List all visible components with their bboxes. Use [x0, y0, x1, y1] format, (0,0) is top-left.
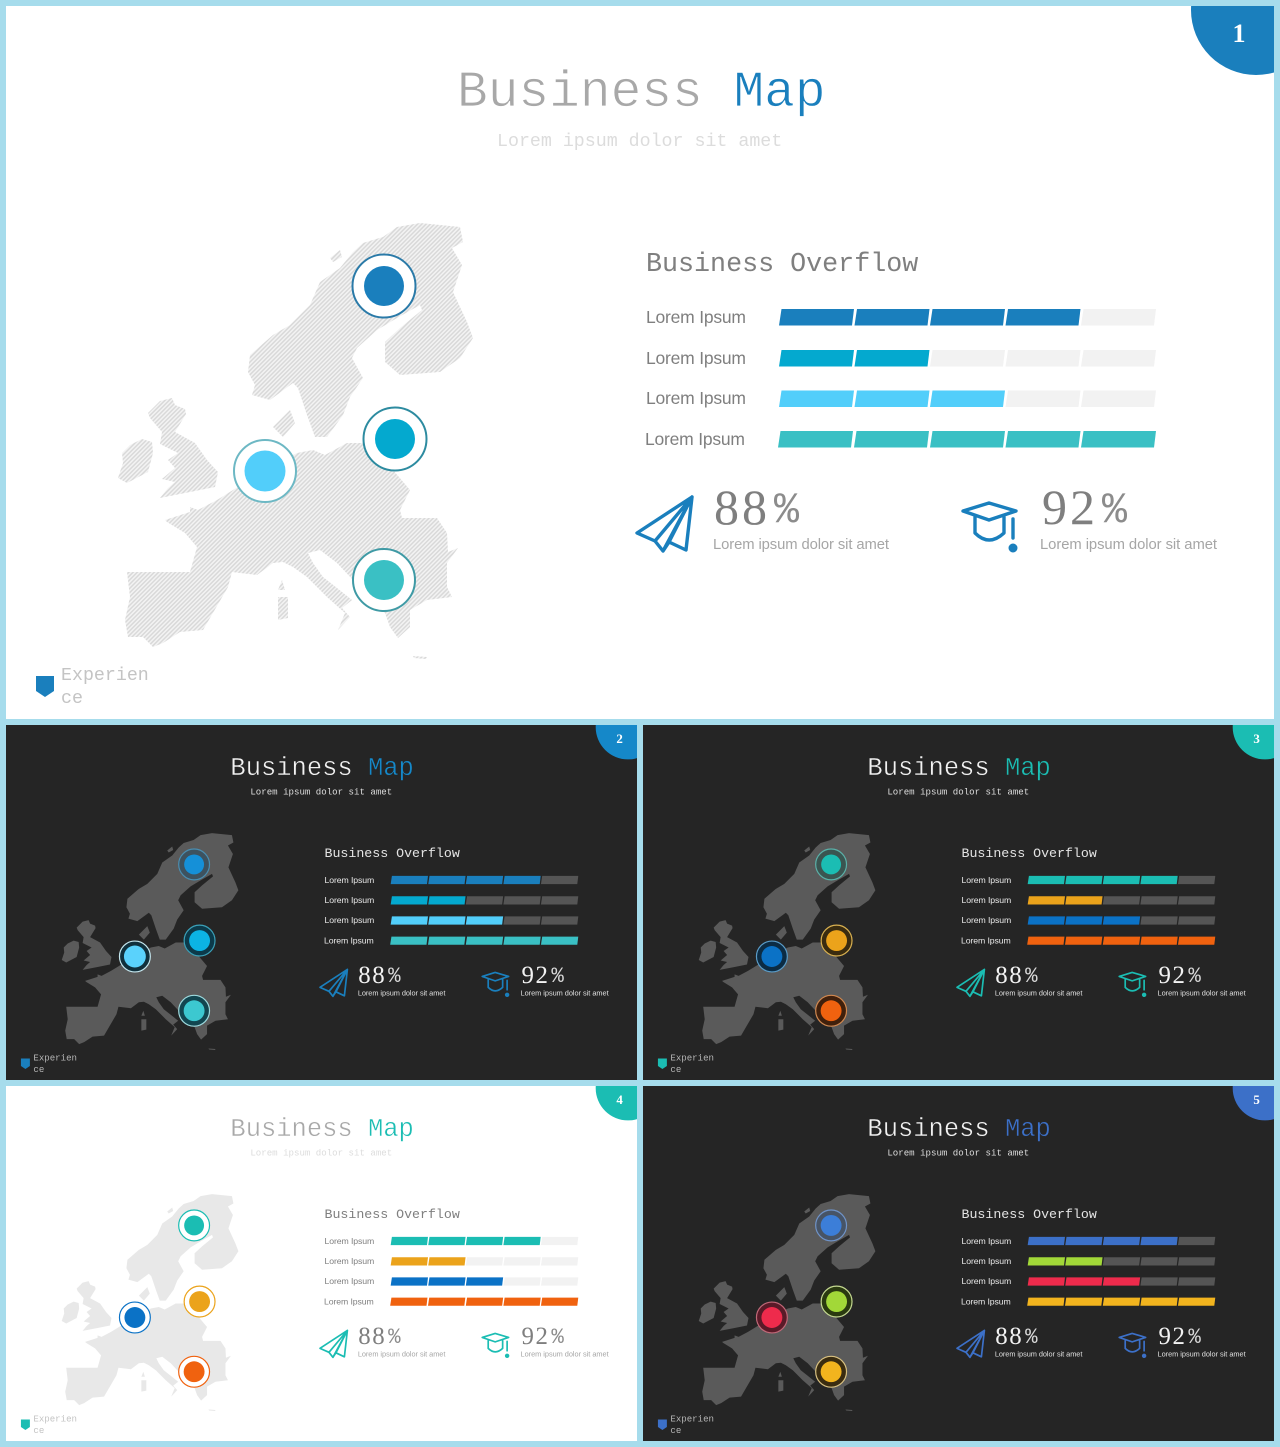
bar row 1: Lorem Ipsum: [324, 875, 374, 885]
stat: 88%: 88: [714, 479, 770, 535]
stat: 92%: 92: [1042, 479, 1098, 535]
logo: Experience: ce: [670, 1425, 681, 1436]
pin: west: [234, 440, 296, 502]
subtitle: Lorem ipsum dolor sit amet: [250, 787, 392, 798]
map of Europe: [699, 1194, 875, 1411]
subtitle: Lorem ipsum dolor sit amet: [887, 1148, 1029, 1159]
logo: Experience: [36, 666, 149, 709]
bar row 2: Lorem Ipsum: [324, 895, 374, 905]
stat: 88%: [358, 962, 445, 997]
pin: west: [756, 1302, 787, 1333]
bar row 2: Lorem Ipsum: [961, 1256, 1011, 1266]
stat: 92%: %: [551, 1325, 565, 1350]
title: Business Map: [230, 1115, 414, 1144]
bar row 4: [961, 936, 1215, 946]
icon: graduation cap: [963, 503, 1016, 551]
bar row 1: Lorem Ipsum: [961, 1236, 1011, 1246]
bar row 1: [961, 1236, 1215, 1246]
icon: graduation cap: [1119, 972, 1146, 996]
icon: paper plane: [957, 969, 984, 996]
stat: 88%: Lorem ipsum dolor sit amet: [358, 988, 445, 997]
title: Business Map: [867, 1115, 1051, 1144]
stat: 92%: 92: [1159, 962, 1186, 989]
icon: graduation cap: [482, 972, 509, 996]
map of Europe: [699, 833, 875, 1050]
logo: Experience: Experien: [33, 1413, 77, 1424]
title: Business Map: [230, 754, 414, 783]
pin: north: [179, 1210, 210, 1241]
stat: 92%: Lorem ipsum dolor sit amet: [1158, 1349, 1246, 1358]
stat: 88%: %: [388, 964, 401, 989]
bar row 1: [646, 307, 1156, 327]
bar row 2: [961, 895, 1215, 905]
bar row 2: Lorem Ipsum: [961, 895, 1011, 905]
stat: 92%: Lorem ipsum dolor sit amet: [521, 1349, 609, 1358]
stat: 92%: %: [1188, 1325, 1202, 1350]
bar row 4: Lorem Ipsum: [324, 1297, 374, 1307]
bar row 3: Lorem Ipsum: [961, 915, 1011, 925]
stat: 92%: Lorem ipsum dolor sit amet: [1158, 988, 1246, 997]
pin: south: [816, 1356, 847, 1387]
stat: 88%: Lorem ipsum dolor sit amet: [358, 1349, 445, 1358]
stat: 92%: 92: [522, 1323, 549, 1350]
pin: west: [756, 941, 787, 972]
pin: south: [816, 995, 847, 1026]
panel: slide 3: [643, 725, 1274, 1080]
bar row 1: [324, 1236, 578, 1246]
pin: east: [364, 408, 426, 470]
stat: 88%: [995, 1323, 1082, 1358]
badge: slide number 5: 5: [1253, 1092, 1260, 1107]
bar row 4: [324, 1297, 578, 1307]
logo: Experience: ce: [61, 689, 83, 709]
panel: slide 4: [6, 1086, 637, 1441]
pin: east: [821, 1286, 852, 1317]
pin: south: [179, 995, 210, 1026]
bar row 1: Lorem Ipsum: [324, 1236, 374, 1246]
stat: 88%: %: [1025, 1325, 1038, 1350]
subtitle: Lorem ipsum dolor sit amet: [250, 1148, 392, 1159]
panel: slide 1: [6, 6, 1274, 719]
pin: north: [816, 849, 847, 880]
stat: 88%: [713, 479, 889, 553]
badge: slide number 4: 4: [616, 1092, 623, 1107]
badge: slide number 2: 2: [616, 731, 623, 746]
panel: slide 2: [6, 725, 637, 1080]
stat: 92%: [1040, 479, 1217, 553]
title: Business Map: [867, 754, 1051, 783]
pin: north: [179, 849, 210, 880]
panel: slide 5: [643, 1086, 1274, 1441]
pin: west: [119, 1302, 150, 1333]
badge: slide number 4: [596, 1056, 660, 1120]
stat: 88%: [358, 1323, 445, 1358]
bar row 4: [645, 429, 1156, 449]
badge: slide number 1: [1191, 0, 1280, 75]
heading: Business Overflow: Business Overflow: [324, 846, 460, 861]
stat: 92%: Lorem ipsum dolor sit amet: [521, 988, 609, 997]
stat: 88%: 88: [358, 1323, 386, 1350]
stat: 88%: Lorem ipsum dolor sit amet: [995, 1349, 1082, 1358]
stat: 88%: Lorem ipsum dolor sit amet: [995, 988, 1082, 997]
heading: Business Overflow: Business Overflow: [646, 250, 918, 280]
stat: 92%: %: [551, 964, 565, 989]
stat: 92%: 92: [522, 962, 549, 989]
stat: 92%: Lorem ipsum dolor sit amet: [1040, 537, 1217, 553]
icon: paper plane: [957, 1330, 984, 1357]
badge: slide number 1: 1: [1232, 19, 1246, 48]
bar row 3: [646, 388, 1156, 408]
stat: 92%: %: [1188, 964, 1202, 989]
logo: Experience: ce: [670, 1064, 681, 1075]
bar row 1: [324, 875, 578, 885]
pin: south: [179, 1356, 210, 1387]
logo: Experience: [21, 1413, 77, 1436]
icon: paper plane: [637, 497, 692, 551]
bar row 4: Lorem Ipsum: [961, 936, 1011, 946]
pin: north: [816, 1210, 847, 1241]
bar row 2: [324, 895, 578, 905]
bar row 2: Lorem Ipsum: [646, 348, 746, 368]
stat: 88%: %: [774, 486, 800, 536]
bar row 3: Lorem Ipsum: [324, 1276, 374, 1286]
bar row 3: [961, 915, 1215, 925]
bar row 1: Lorem Ipsum: [961, 875, 1011, 885]
logo: Experience: Experien: [670, 1052, 714, 1063]
subtitle: Lorem ipsum dolor sit amet: [497, 132, 782, 152]
icon: graduation cap: [482, 1333, 509, 1357]
stat: 88%: [995, 962, 1082, 997]
heading: Business Overflow: Business Overflow: [324, 1207, 460, 1222]
stat: 88%: 88: [358, 962, 386, 989]
bar row 3: [324, 1276, 578, 1286]
logo: Experience: Experien: [61, 666, 149, 686]
stat: 92%: %: [1102, 486, 1128, 536]
pin: west: [119, 941, 150, 972]
stat: 92%: [521, 1323, 609, 1358]
heading: Business Overflow: Business Overflow: [961, 1207, 1097, 1222]
bar row 4: Lorem Ipsum: [645, 429, 745, 449]
logo: Experience: [658, 1413, 714, 1436]
pin: east: [821, 925, 852, 956]
bar row 4: [961, 1297, 1215, 1307]
stat: 88%: Lorem ipsum dolor sit amet: [713, 537, 889, 553]
bar row 2: [324, 1256, 578, 1266]
heading: Business Overflow: Business Overflow: [961, 846, 1097, 861]
bar row 3: Lorem Ipsum: [961, 1276, 1011, 1286]
icon: paper plane: [320, 969, 347, 996]
bar row 3: [961, 1276, 1215, 1286]
logo: Experience: Experien: [670, 1413, 714, 1424]
bar row 2: Lorem Ipsum: [324, 1256, 374, 1266]
stat: 92%: [521, 962, 609, 997]
bar row 3: Lorem Ipsum: [324, 915, 374, 925]
stat: 88%: 88: [995, 1323, 1023, 1350]
bar row 2: [961, 1256, 1215, 1266]
map of Europe: [62, 833, 238, 1050]
pin: east: [184, 1286, 215, 1317]
pin: north: [352, 254, 416, 318]
stat: 88%: %: [1025, 964, 1038, 989]
bar row 4: [324, 936, 578, 946]
bar row 4: Lorem Ipsum: [961, 1297, 1011, 1307]
badge: slide number 5: [1233, 1056, 1280, 1120]
bar row 1: Lorem Ipsum: [646, 307, 746, 327]
stat: 92%: [1158, 1323, 1246, 1358]
bar row 4: Lorem Ipsum: [324, 936, 374, 946]
map of Europe: [62, 1194, 238, 1411]
stat: 88%: %: [388, 1325, 401, 1350]
logo: Experience: [21, 1052, 77, 1075]
logo: Experience: ce: [33, 1425, 44, 1436]
badge: slide number 3: [1233, 695, 1280, 759]
subtitle: Lorem ipsum dolor sit amet: [887, 787, 1029, 798]
pin: south: [353, 549, 415, 611]
bar row 1: [961, 875, 1215, 885]
icon: graduation cap: [1119, 1333, 1146, 1357]
logo: Experience: Experien: [33, 1052, 77, 1063]
badge: slide number 2: [596, 695, 660, 759]
title: Business Map: [457, 64, 826, 122]
icon: paper plane: [320, 1330, 347, 1357]
stat: 88%: 88: [995, 962, 1023, 989]
pin: east: [184, 925, 215, 956]
badge: slide number 3: 3: [1253, 731, 1260, 746]
logo: Experience: ce: [33, 1064, 44, 1075]
map of Europe: [118, 223, 473, 659]
stat: 92%: [1158, 962, 1246, 997]
bar row 2: [646, 348, 1156, 368]
logo: Experience: [658, 1052, 714, 1075]
bar row 3: [324, 915, 578, 925]
bar row 3: Lorem Ipsum: [646, 388, 746, 408]
stat: 92%: 92: [1159, 1323, 1186, 1350]
